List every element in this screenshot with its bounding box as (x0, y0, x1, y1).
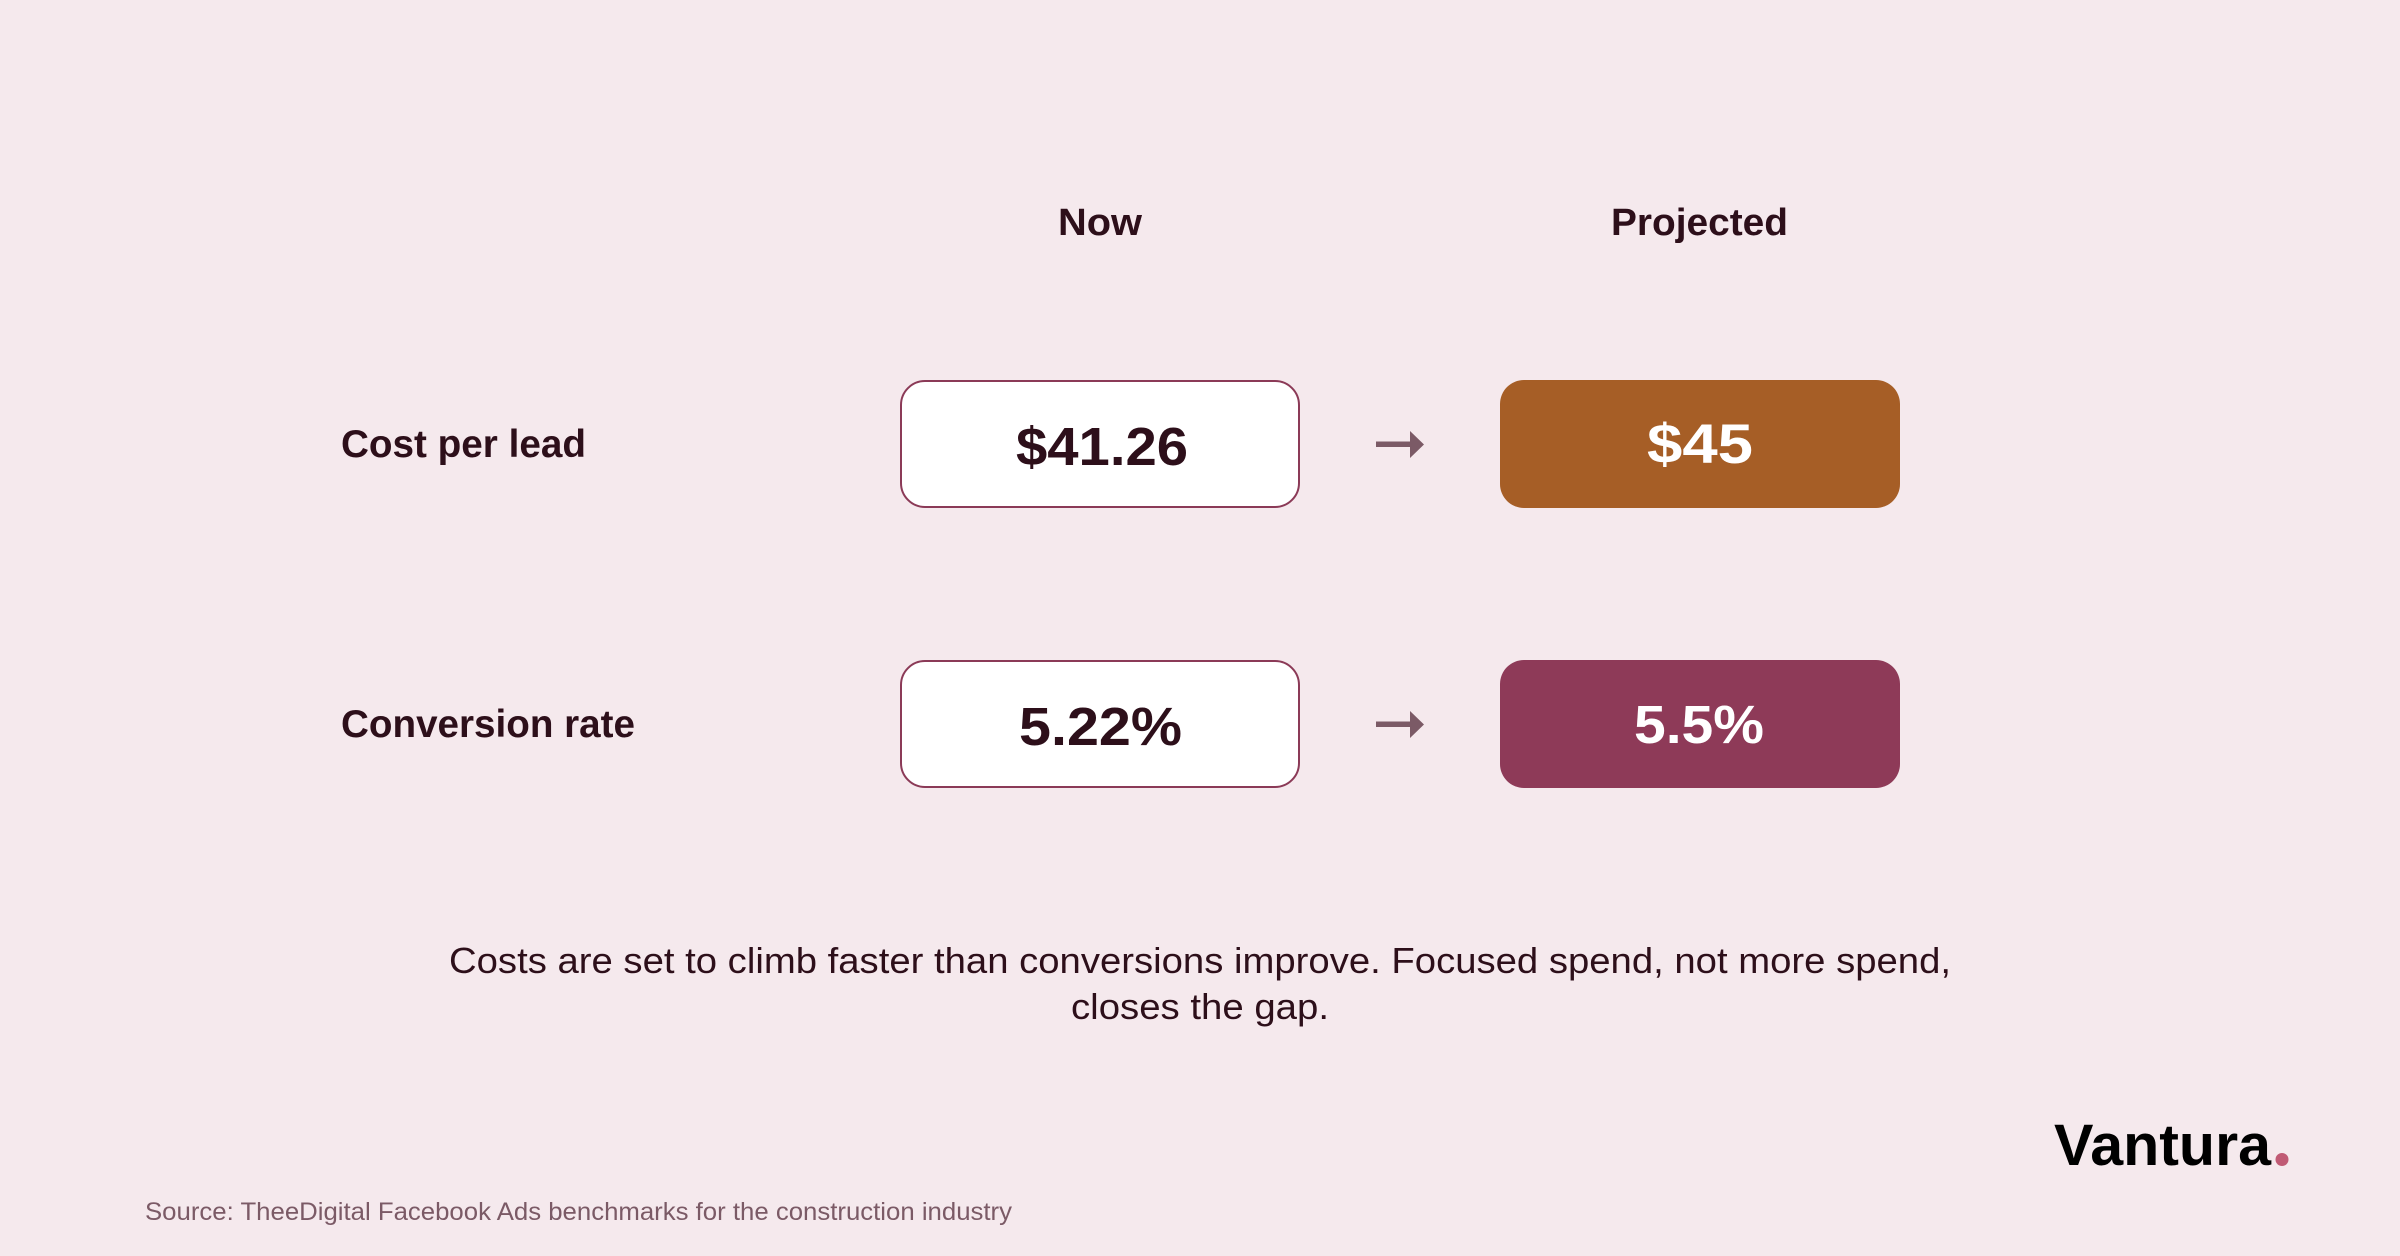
value box: current conversion rate: 5.22% (1019, 697, 1182, 757)
column heading: Now: Now (1058, 202, 1142, 244)
row label: conversion rate: Conversion rate (341, 703, 635, 746)
takeaway text: Costs are set to climb faster than conversions improve. Focused spend, not more spend, (449, 940, 1951, 981)
row label: cost per lead: Cost per lead (341, 423, 586, 466)
row: conversion rate (341, 660, 1900, 788)
source note: Source: TheeDigital Facebook Ads benchmarks for the construction industry (145, 1198, 1013, 1226)
takeaway text (449, 940, 1951, 1027)
row: cost per lead (341, 380, 1900, 508)
value box: projected cost per lead: $45 (1647, 412, 1753, 475)
value box: projected conversion rate (1500, 660, 1900, 788)
value box: projected cost per lead (1500, 380, 1900, 508)
value box: current conversion rate (901, 661, 1299, 787)
value box: current cost per lead (901, 381, 1299, 507)
takeaway text: closes the gap. (1071, 986, 1329, 1027)
arrow: conversion rate (1376, 711, 1424, 738)
logo: Vantura: Vantura (2054, 1113, 2272, 1178)
value box: current cost per lead: $41.26 (1016, 417, 1188, 477)
arrow: cost per lead (1376, 431, 1424, 458)
value box: projected conversion rate: 5.5% (1634, 695, 1764, 755)
column heading: Projected: Projected (1611, 202, 1788, 244)
